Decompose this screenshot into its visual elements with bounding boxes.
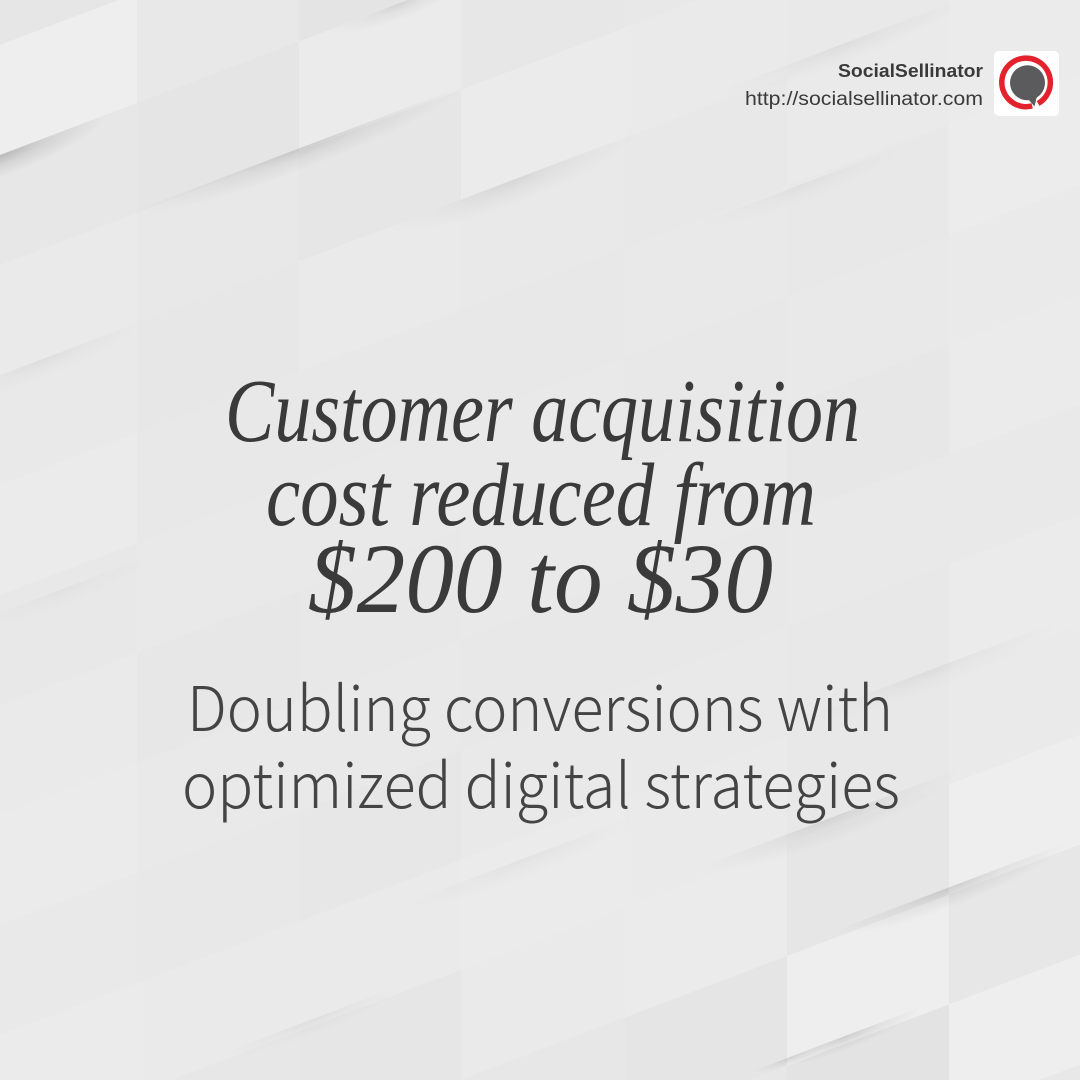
title: $200 to $30: [308, 523, 773, 634]
subtitle: Doubling conversions with: [187, 659, 893, 749]
title: Customer acquisition: [225, 362, 860, 461]
icon: logo speech bubble: [994, 51, 1059, 116]
brand name: SocialSellinator: [838, 60, 983, 81]
brand header: [745, 51, 1059, 116]
brand url: http://socialsellinator.com: [745, 89, 983, 110]
title: cost reduced from: [266, 446, 816, 545]
title: [225, 362, 860, 634]
subtitle: optimized digital strategies: [182, 736, 900, 826]
subtitle: [182, 659, 900, 826]
